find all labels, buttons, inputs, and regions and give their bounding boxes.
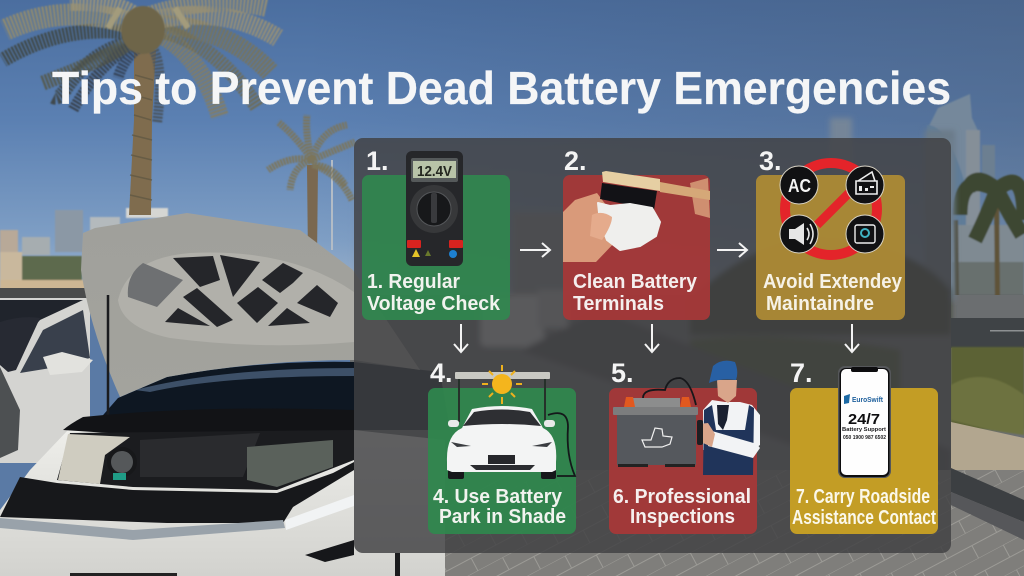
card 3: avoid extended drain: Maintaindre <box>766 293 874 315</box>
icon: smartphone: 24/7 <box>848 411 880 428</box>
translucent panel <box>354 138 951 553</box>
front grille area <box>0 462 354 523</box>
label: 4. Use Battery <box>433 486 563 508</box>
right verge: road, bushes, sand, curb, pavers <box>445 318 1024 576</box>
icon: smartphone: Battery Support <box>842 427 886 433</box>
hood lattice openings <box>128 255 338 327</box>
icon: smartphone: EuroSwift <box>852 395 883 404</box>
step number 2: 2. <box>564 146 587 176</box>
card 2: clean battery terminals: Terminals <box>573 293 664 315</box>
hood inner frame <box>118 252 354 345</box>
arrow: step 2 to step 3 <box>717 243 747 257</box>
icon: technician in cap and overalls <box>697 361 760 475</box>
card 7: carry roadside assistance contact: Assistance Contact <box>792 507 936 529</box>
windshield <box>90 362 450 430</box>
step number 1: 1. <box>366 146 389 176</box>
arrow: step 1 to step 2 <box>520 243 550 257</box>
right towers and palms <box>927 94 1024 318</box>
illustration: white car with raised hood and engine bay <box>0 213 450 576</box>
icon: car battery <box>613 378 698 467</box>
icon: prohibition sign with accessories <box>780 163 884 255</box>
arrow: step 2 down to step 5 <box>645 324 659 352</box>
label: Avoid Extendey <box>763 271 903 293</box>
palm tree small <box>268 115 355 260</box>
step number 4: 4. <box>430 358 453 388</box>
second car on left <box>0 298 93 463</box>
distant towers left <box>0 208 168 292</box>
headlight <box>285 495 354 530</box>
car body <box>0 430 445 576</box>
icon: smartphone: 050 1900 987 6502 <box>843 435 886 441</box>
icon: multimeter <box>406 151 463 266</box>
step number 3: 3. <box>759 146 782 176</box>
road and ground <box>350 295 1024 576</box>
hood strut <box>107 295 109 425</box>
card 2: clean battery terminals <box>563 146 710 320</box>
card 4: use battery park in shade: Park in Shade <box>439 506 566 528</box>
icon: smartphone <box>838 366 891 478</box>
silver trim strip <box>0 518 285 540</box>
engine bay <box>57 430 354 490</box>
card 5: professional inspections: Inspections <box>630 506 735 528</box>
label: Clean Battery <box>573 271 698 293</box>
arrow: step 3 down to step 7 <box>845 324 859 352</box>
cowl <box>63 409 354 435</box>
card 3: avoid extended drain <box>756 146 905 320</box>
hood underside <box>81 213 420 397</box>
card 7: carry roadside assistance contact <box>790 358 938 534</box>
lower vent <box>305 540 354 562</box>
arrow: step 1 down to step 4 <box>454 324 468 352</box>
palm tree large <box>3 2 278 215</box>
card 1: regular voltage check <box>362 146 510 320</box>
label: 6. Professional <box>613 486 751 508</box>
card 5: professional inspections <box>609 358 760 534</box>
icon: hand with brush <box>563 171 710 262</box>
buildings and cars behind the panel <box>354 118 955 500</box>
icon: multimeter: 12.4V <box>417 164 452 180</box>
card 1: regular voltage check: Voltage Check <box>367 293 501 315</box>
icon: car under solar canopy <box>447 365 575 479</box>
step number 5: 5. <box>611 358 634 388</box>
card 4: use battery park in shade <box>428 358 576 534</box>
ground and parked car roof <box>0 288 354 308</box>
step number 7: 7. <box>790 358 813 388</box>
icon: prohibition sign with accessories: AC <box>788 176 811 196</box>
title: Tips to Prevent Dead Battery Emergencies <box>52 62 951 114</box>
label: 7. Carry Roadside <box>796 486 930 508</box>
label: 1. Regular <box>367 271 460 293</box>
